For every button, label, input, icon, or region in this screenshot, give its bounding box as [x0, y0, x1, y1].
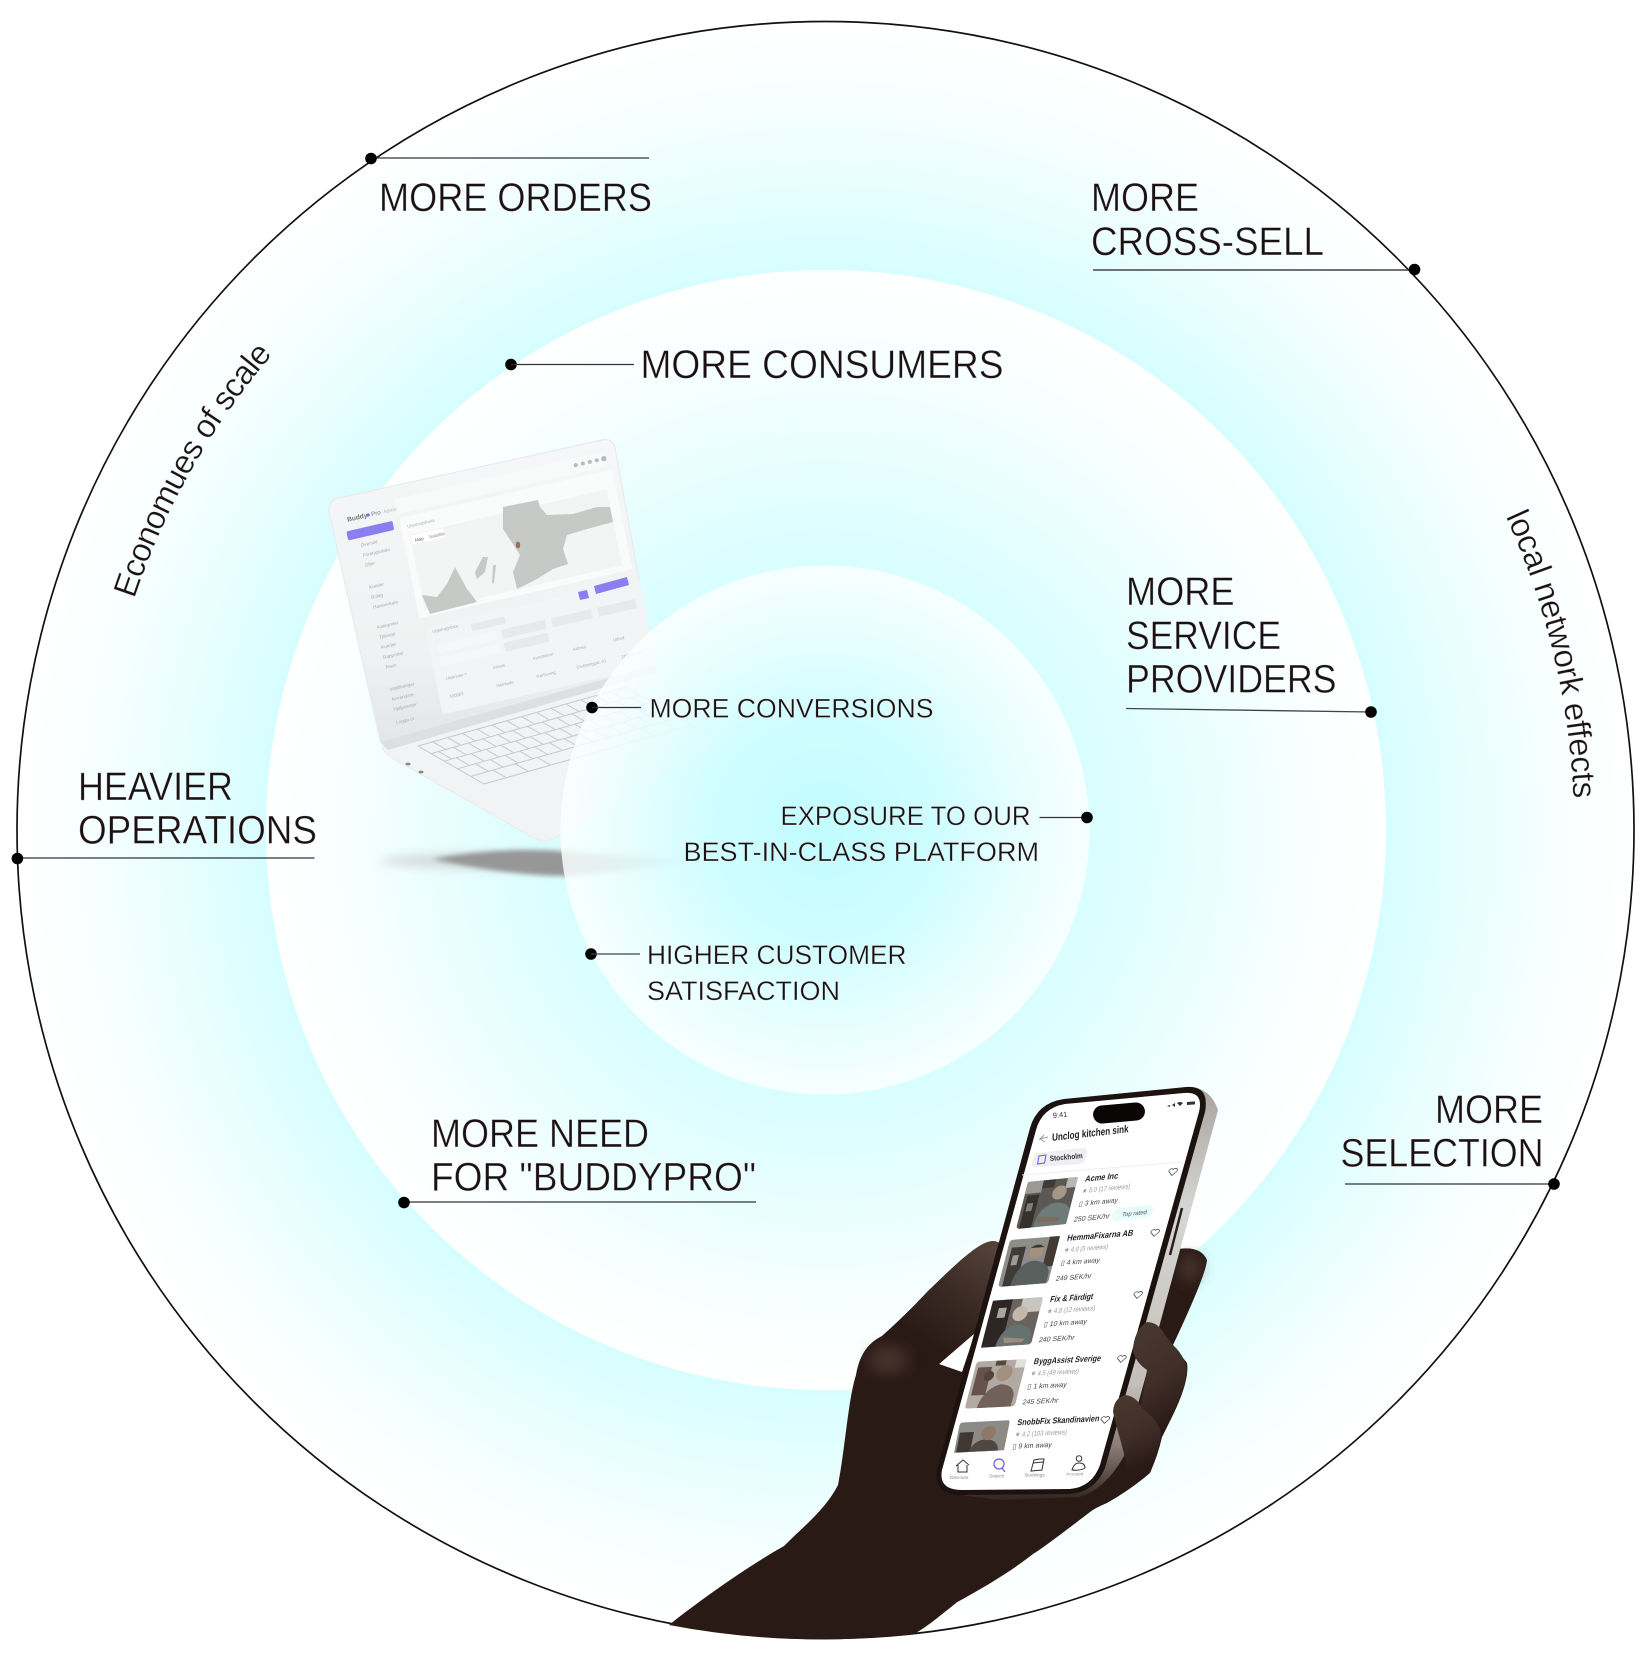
- phone frame: [936, 1087, 1206, 1495]
- divider: [1022, 1162, 1183, 1175]
- map pin: [516, 542, 520, 548]
- label: heavier operations: [12, 765, 317, 864]
- label: higher customer satisfaction: HIGHER CUSTOMER: [647, 940, 906, 970]
- hand highlights: [868, 1254, 1201, 1374]
- row: ByggAssist Sverige: ▯ 1 km away: [1027, 1381, 1068, 1391]
- photo: [1016, 1177, 1078, 1229]
- laptop base: [382, 670, 717, 841]
- sidebar items: Företagsdata: [362, 547, 391, 558]
- search title: [1040, 1123, 1129, 1144]
- row: Acme Inc: ▯ 3 km away: [1078, 1196, 1120, 1208]
- nav icons: [956, 1456, 1085, 1472]
- purple buttons: [578, 577, 629, 600]
- sidebar logo: Pro: [371, 509, 382, 518]
- table labels: Arbete: [492, 662, 506, 670]
- label: exposure to platform: [684, 801, 1093, 867]
- row: ByggAssist Sverige: ★ 4.5 (49 reviews): [1030, 1367, 1080, 1378]
- sidebar logo: Buddy: [347, 512, 368, 524]
- status bar: [1052, 1101, 1195, 1120]
- map panel title: Uppdragskarta: [407, 518, 436, 529]
- table labels: Uppdragslista: [432, 623, 459, 634]
- label: higher customer satisfaction: SATISFACTION: [647, 976, 840, 1006]
- label: more selection: [1340, 1088, 1560, 1190]
- label: more conversions: MORE CONVERSIONS: [650, 694, 934, 724]
- label: more cross-sell: CROSS-SELL: [1091, 220, 1324, 264]
- lower panel fields: [435, 587, 639, 667]
- row: Fix & Fardigt: ▯ 10 km away: [1043, 1318, 1088, 1329]
- sidebar items: Kunder: [381, 642, 397, 650]
- sidebar items: Kunder: [369, 582, 385, 590]
- label: more cross-sell: [1091, 176, 1420, 275]
- label: exposure to platform: BEST-IN-CLASS PLATFORM: [684, 837, 1039, 867]
- table labels: Rørfixning: [536, 670, 557, 679]
- label: more selection: SELECTION: [1340, 1132, 1544, 1176]
- row: Acme Inc: [1016, 1165, 1179, 1231]
- table labels: Adress: [572, 644, 586, 652]
- table labels: 430983: [449, 691, 465, 699]
- screen content: [342, 449, 657, 727]
- top rated tag: [1111, 1204, 1155, 1222]
- row: SnobbFix Skandinavien: ▯ 9 km away: [1012, 1442, 1053, 1451]
- lower panel: [425, 579, 657, 714]
- laptop shadow: [380, 850, 700, 876]
- label: more orders: [365, 153, 652, 220]
- top rated tag: Top rated: [1121, 1209, 1148, 1218]
- sidebar logo: Admin: [383, 506, 398, 515]
- row: Fix & Fardigt: [981, 1288, 1144, 1348]
- table labels: Drottninggat. 41: [576, 658, 607, 670]
- hand holding phone: [669, 1241, 1207, 1639]
- row: Fix & Fardigt: ★ 4.8 (12 reviews): [1046, 1304, 1096, 1316]
- label: more service providers: PROVIDERS: [1126, 658, 1336, 702]
- sidebar button: [346, 521, 394, 540]
- table labels: Utskriven >: [445, 671, 468, 681]
- row: SnobbFix Skandinavien: ★ 4.2 (103 reviews): [1014, 1428, 1068, 1439]
- laptop screen: [329, 440, 655, 743]
- phone screen: [941, 1093, 1200, 1490]
- table labels: Kundnamn: [532, 651, 554, 661]
- row: ByggAssist Sverige: [965, 1352, 1128, 1409]
- phone side band: [960, 1087, 1218, 1500]
- phone: [936, 1087, 1218, 1500]
- nav labels: Account: [1066, 1472, 1084, 1478]
- sidebar items: Rapporter: [383, 650, 404, 660]
- nav labels: Bookings: [1025, 1472, 1045, 1478]
- table labels: Hämtade: [496, 679, 515, 688]
- label: exposure to platform: EXPOSURE TO OUR: [780, 801, 1030, 831]
- row: Acme Inc: Acme Inc: [1084, 1171, 1120, 1184]
- nav labels: [950, 1472, 1084, 1481]
- curved label: economues of scale: Economues of scale: [114, 346, 270, 596]
- sidebar items: Inställningar: [389, 681, 415, 692]
- front fingers: [1113, 1322, 1187, 1473]
- row: ByggAssist Sverige: 245 SEK/hr: [1022, 1397, 1060, 1406]
- label: higher customer satisfaction: [585, 940, 906, 1006]
- row: ByggAssist Sverige: ByggAssist Sverige: [1033, 1353, 1102, 1366]
- middle circle: [266, 270, 1386, 1390]
- ports: [406, 763, 424, 773]
- bottom navigation: [950, 1456, 1085, 1481]
- label: more service providers: [1126, 570, 1377, 718]
- nav labels: Discover: [950, 1475, 969, 1481]
- top bar: [394, 451, 607, 515]
- keyboard: [418, 687, 691, 784]
- map base: [410, 489, 622, 611]
- sidebar items: Användare: [391, 692, 415, 702]
- row: SnobbFix Skandinavien: [954, 1413, 1111, 1454]
- row: Acme Inc: 250 SEK/hr: [1073, 1212, 1111, 1224]
- sidebar items: Logga ut: [396, 716, 415, 725]
- inner circle: [560, 566, 1090, 1094]
- label: more service providers: SERVICE: [1126, 614, 1281, 658]
- row: HemmaFixarna AB: ▯ 4 km away: [1060, 1256, 1101, 1267]
- sidebar items: Översikt: [360, 538, 379, 548]
- location pill: [1032, 1148, 1087, 1167]
- side button: [1170, 1208, 1182, 1255]
- search icon: [994, 1459, 1005, 1472]
- label: more service providers: MORE: [1126, 570, 1234, 614]
- row: Acme Inc: ★ 5.0 (17 reviews): [1081, 1183, 1131, 1195]
- curved label: local network effects: local network effects: [1506, 508, 1594, 798]
- table labels: 2025-01-21: [621, 650, 644, 659]
- label: more need for buddypro: MORE NEED: [431, 1112, 649, 1156]
- sidebar items: Hjälpcenter: [393, 702, 418, 712]
- top bar icons: [573, 455, 607, 468]
- table labels: [432, 584, 644, 700]
- sidebar items: Team: [385, 662, 397, 670]
- row: HemmaFixarna AB: HemmaFixarna AB: [1066, 1228, 1135, 1243]
- row: HemmaFixarna AB: ★ 4.9 (5 reviews): [1063, 1243, 1109, 1254]
- label: more cross-sell: MORE: [1091, 176, 1199, 220]
- hinge: [380, 665, 657, 750]
- label: more orders: MORE ORDERS: [379, 176, 652, 220]
- search title: Unclog kitchen sink: [1052, 1123, 1129, 1144]
- sidebar items: Tjänster: [379, 631, 397, 640]
- label: heavier operations: HEAVIER: [78, 765, 233, 809]
- row: Fix & Fardigt: 240 SEK/hr: [1038, 1334, 1076, 1344]
- sidebar items: Kategorier: [377, 620, 399, 630]
- label: more consumers: [505, 343, 1004, 387]
- sidebar items: Hantverkare: [373, 599, 399, 610]
- sidebar items: [360, 536, 424, 725]
- label: more need for buddypro: [398, 1112, 756, 1208]
- thumb shading: [882, 1241, 1003, 1364]
- row: SnobbFix Skandinavien: SnobbFix Skandinavien: [1017, 1413, 1100, 1427]
- map water shapes: [422, 500, 613, 614]
- map tabs: Map: [415, 536, 425, 543]
- row: HemmaFixarna AB: 249 SEK/hr: [1055, 1272, 1093, 1283]
- laptop: [329, 440, 717, 841]
- label: more consumers: MORE CONSUMERS: [640, 343, 1004, 387]
- dynamic island: [1092, 1102, 1146, 1124]
- nav labels: Search: [989, 1474, 1005, 1480]
- location pill: Stockholm: [1049, 1151, 1083, 1163]
- row: Fix & Fardigt: Fix & Färdigt: [1049, 1291, 1095, 1304]
- map panel: [399, 469, 632, 618]
- sidebar logo: [347, 505, 398, 524]
- label: heavier operations: OPERATIONS: [78, 808, 317, 852]
- sidebar items: Bolag: [371, 592, 384, 600]
- label: more need for buddypro: FOR "BUDDYPRO": [431, 1156, 756, 1200]
- sidebar items: Offer: [364, 561, 376, 568]
- label: more selection: MORE: [1435, 1088, 1543, 1132]
- row: HemmaFixarna AB: [998, 1226, 1161, 1287]
- map tabs: [411, 528, 446, 544]
- status bar: 9:41: [1052, 1110, 1068, 1120]
- map tabs: Satellite: [429, 531, 446, 540]
- table labels: Utförd: [612, 635, 625, 643]
